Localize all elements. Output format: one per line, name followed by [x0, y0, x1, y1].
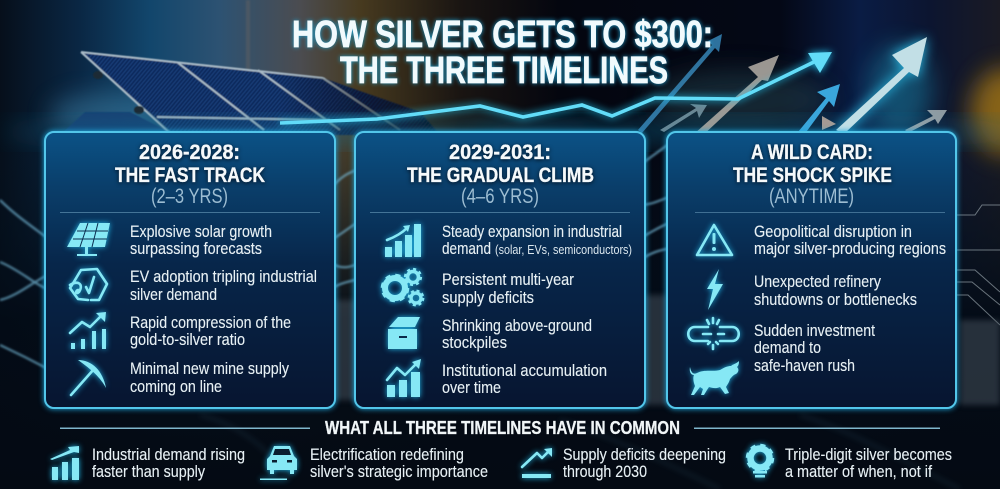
- text: mine supply: coming on line: [130, 377, 222, 396]
- icon: warning triangle: [697, 225, 732, 255]
- text: geopolitical: [754, 222, 946, 258]
- icon: pickaxe: [71, 360, 106, 395]
- text: solar growth: [130, 222, 272, 258]
- icon: broken chain: [688, 318, 739, 349]
- item: industrial demand: faster than supply: [92, 462, 206, 481]
- icon: bull: [690, 361, 739, 395]
- text: gold-to-silver: Rapid compression of the: [130, 313, 291, 332]
- heading: shock spike: THE SHOCK SPIKE: [733, 163, 892, 187]
- heading: fast track: (2–3 YRS): [151, 184, 228, 208]
- text: institutional: Institutional accumulation: [442, 361, 607, 380]
- text: industrial demand: [442, 222, 632, 258]
- heading: gradual climb: 2029-2031:: [449, 140, 551, 164]
- icon: solar panel: [67, 223, 110, 256]
- text: industrial demand: Steady expansion in industrial: [442, 222, 622, 241]
- text: stockpiles: [442, 316, 592, 352]
- coin stack shapes: [334, 295, 1000, 405]
- text: refinery: shutdowns or bottlenecks: [754, 290, 917, 309]
- small blue arrows: [660, 104, 707, 132]
- icon: storage box: [388, 317, 420, 349]
- icon: deficit trend: [522, 448, 552, 478]
- title: THE THREE TIMELINES: [340, 50, 668, 92]
- icon: rising bars: [70, 312, 106, 349]
- text: institutional: [442, 361, 607, 397]
- faint lower streaks: [200, 415, 960, 489]
- text: gold-to-silver: gold-to-silver ratio: [130, 330, 245, 349]
- text: investment demand: demand to: [754, 338, 821, 357]
- icon: electric car: [260, 446, 297, 480]
- heading: gradual climb: (4–6 YRS): [461, 184, 539, 208]
- title: HOW SILVER GETS TO $300:: [292, 14, 713, 56]
- rising arrows: [280, 34, 947, 138]
- item: triple-digit silver: a matter of when, not if: [785, 462, 932, 481]
- heading: gradual climb: THE GRADUAL CLIMB: [407, 163, 594, 187]
- heading: fast track: THE FAST TRACK: [115, 163, 265, 187]
- solar panels backdrop: [60, 52, 440, 135]
- text: geopolitical: Geopolitical disruption in: [754, 222, 912, 241]
- heading: gradual climb: [407, 140, 594, 208]
- text: refinery: Unexpected refinery: [754, 272, 882, 291]
- text: gold-to-silver: [130, 313, 291, 349]
- panel: the shock spike: [667, 132, 956, 408]
- text: investment demand: [754, 321, 875, 375]
- text: industrial demand: (solar, EVs, semiconductors): [495, 243, 632, 257]
- text: solar growth: surpassing forecasts: [130, 239, 262, 258]
- section: what all three timelines have in common: [50, 417, 952, 481]
- panel: the gradual climb: [355, 132, 645, 408]
- text: stockpiles: Shrinking above-ground: [442, 316, 592, 335]
- beige arrow: [694, 55, 779, 138]
- icon: accumulation chart: [387, 359, 421, 397]
- item: triple-digit silver: [785, 445, 952, 481]
- text: investment demand: safe-haven rush: [754, 356, 855, 375]
- price line: [280, 52, 832, 123]
- panel: the fast track: [45, 132, 335, 408]
- text: mine supply: Minimal new mine supply: [130, 359, 290, 378]
- text: geopolitical: major silver-producing regions: [754, 239, 946, 258]
- text: EV adoption: [130, 267, 317, 304]
- icon: lightning bolt: [707, 269, 723, 310]
- item: electrification: [310, 445, 488, 481]
- small grey arrows: [822, 110, 947, 133]
- text: refinery: [754, 272, 917, 309]
- item: supply deficits: [563, 445, 726, 481]
- text: mine supply: [130, 359, 290, 396]
- item: industrial demand: Industrial demand rising: [92, 445, 245, 464]
- item: electrification: Electrification redefining: [310, 445, 464, 464]
- heading: fast track: [115, 140, 265, 208]
- icon: EV recycling: [70, 269, 107, 300]
- icon: gears: [382, 269, 423, 305]
- item: electrification: silver's strategic importance: [310, 462, 488, 481]
- text: stockpiles: stockpiles: [442, 333, 507, 352]
- text: institutional: over time: [442, 378, 501, 397]
- item: supply deficits: Supply deficits deepening: [563, 445, 726, 464]
- item: triple-digit silver: Triple-digit silver becomes: [785, 445, 952, 464]
- text: supply deficits: supply deficits: [442, 288, 534, 307]
- energy wave lines: [0, 142, 672, 370]
- text: EV adoption: silver demand: [130, 285, 217, 304]
- circuit traces right: [956, 205, 1000, 325]
- heading: shock spike: [733, 140, 892, 208]
- text: investment demand: Sudden investment: [754, 321, 875, 340]
- text: supply deficits: [442, 270, 574, 307]
- heading: shock spike: A WILD CARD:: [751, 140, 873, 164]
- icon: growth bars: [385, 224, 421, 257]
- section heading: WHAT ALL THREE TIMELINES HAVE IN COMMON: [325, 417, 680, 438]
- text: industrial demand: demand: [442, 239, 491, 258]
- large light arrow: [836, 37, 927, 134]
- title: [292, 14, 713, 92]
- heading: fast track: 2026-2028:: [139, 140, 240, 164]
- icon: demand bars: [50, 446, 79, 480]
- text: supply deficits: Persistent multi-year: [442, 270, 574, 289]
- item: supply deficits: through 2030: [563, 462, 647, 481]
- item: industrial demand: [92, 445, 245, 481]
- heading: shock spike: (ANYTIME): [769, 184, 854, 208]
- text: EV adoption: EV adoption tripling industrial: [130, 267, 317, 286]
- icon: gear light bulb: [748, 446, 772, 478]
- blue arrow: [638, 34, 722, 133]
- text: solar growth: Explosive solar growth: [130, 222, 272, 241]
